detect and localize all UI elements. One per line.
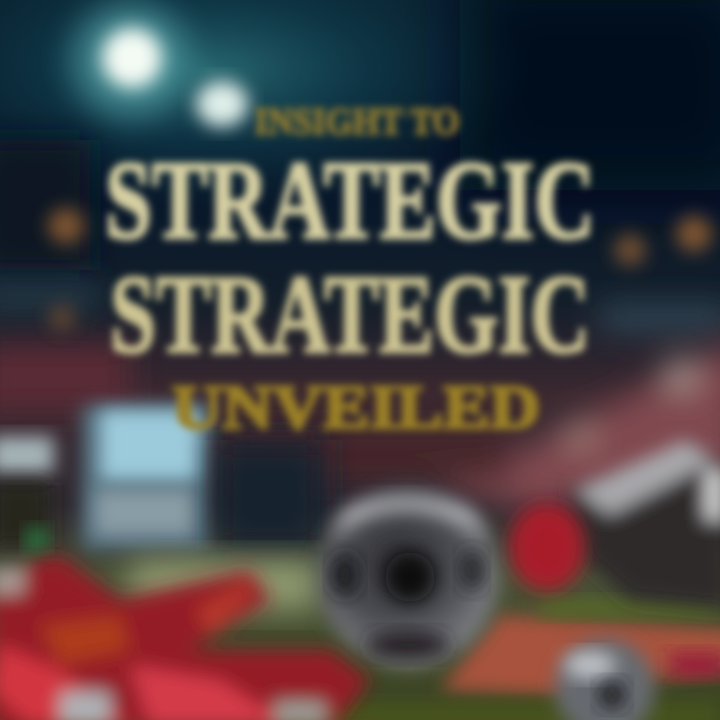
left stand block [0, 436, 54, 554]
red band on equipment [509, 503, 585, 591]
stadium lights: small orange spots [48, 208, 712, 331]
floodlight: large [72, 2, 188, 118]
grey equipment object [570, 440, 720, 610]
floodlight: small [196, 81, 248, 127]
heading: top line: INSIGHT TO [254, 101, 460, 143]
stadium stands: red crowd [0, 285, 720, 510]
red streak at right edge [670, 652, 720, 678]
heading: bottom line: UNVEILED [172, 374, 540, 442]
soccer ball: large [318, 487, 498, 667]
red ribbons [0, 555, 370, 720]
soccer ball: small [555, 638, 655, 720]
goal structure: glass panel [82, 405, 325, 550]
pitch: field and orange ground [130, 560, 720, 720]
